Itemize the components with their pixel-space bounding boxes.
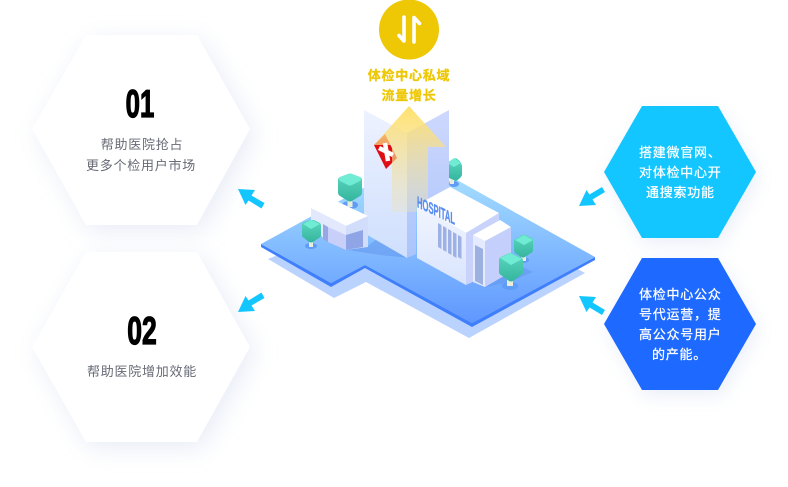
tree right <box>514 234 533 263</box>
panel: hexagon 02 <box>32 252 255 448</box>
heading: traffic growth <box>368 68 450 103</box>
text: hexagon 01 caption: 帮助医院抢占 <box>101 137 183 152</box>
text: official account <box>639 287 722 362</box>
text: hexagon 01 caption: 更多个检用户市场 <box>86 158 196 173</box>
hospital windows <box>438 223 462 259</box>
arrow: from account hexagon <box>579 296 605 315</box>
icon: yellow traffic circle <box>379 0 439 60</box>
hospital wing <box>473 220 511 287</box>
arrow: growth <box>374 106 446 212</box>
text: hexagon 01 caption <box>86 137 196 173</box>
platform edge <box>261 244 595 327</box>
text: official account: 号代运营，提 <box>639 307 722 322</box>
tree front left <box>302 220 321 249</box>
text: search features: 搭建微官网、 <box>639 145 722 160</box>
heading: traffic growth: 流量增长 <box>381 88 437 103</box>
icon: white cross <box>379 143 393 161</box>
number 01: 01 <box>126 83 154 126</box>
arrow: from search hexagon <box>579 187 605 206</box>
text: official account: 的产能。 <box>652 347 707 362</box>
tree back left <box>338 174 362 209</box>
icon: red sign plate <box>374 134 397 169</box>
platform lower layer <box>268 210 585 338</box>
panel: hexagon search features <box>604 106 759 244</box>
tree back right <box>447 158 462 187</box>
text: official account: 体检中心公众 <box>639 287 722 302</box>
tower <box>364 110 449 258</box>
hospital main building: HOSPITAL <box>417 193 455 229</box>
illustration: isometric hospital <box>261 106 595 338</box>
text: search features: 通搜索功能 <box>646 185 715 200</box>
tree front right <box>499 253 523 290</box>
small building <box>311 198 368 250</box>
heading: traffic growth: 体检中心私域 <box>368 68 450 83</box>
number 02: 02 <box>127 310 157 353</box>
text: hexagon 02 caption: 帮助医院增加效能 <box>87 364 197 379</box>
platform top <box>261 180 595 323</box>
panel: hexagon 01 <box>32 35 255 231</box>
text: search features: 对体检中心开 <box>639 165 722 180</box>
building shadows <box>347 238 533 287</box>
arrow: to hexagon 01 <box>238 189 264 208</box>
text: search features <box>639 145 722 200</box>
hospital main building <box>417 187 499 285</box>
text: official account: 高公众号用户 <box>639 327 722 342</box>
arrow: to hexagon 02 <box>238 292 264 312</box>
panel: hexagon official account <box>604 258 759 396</box>
